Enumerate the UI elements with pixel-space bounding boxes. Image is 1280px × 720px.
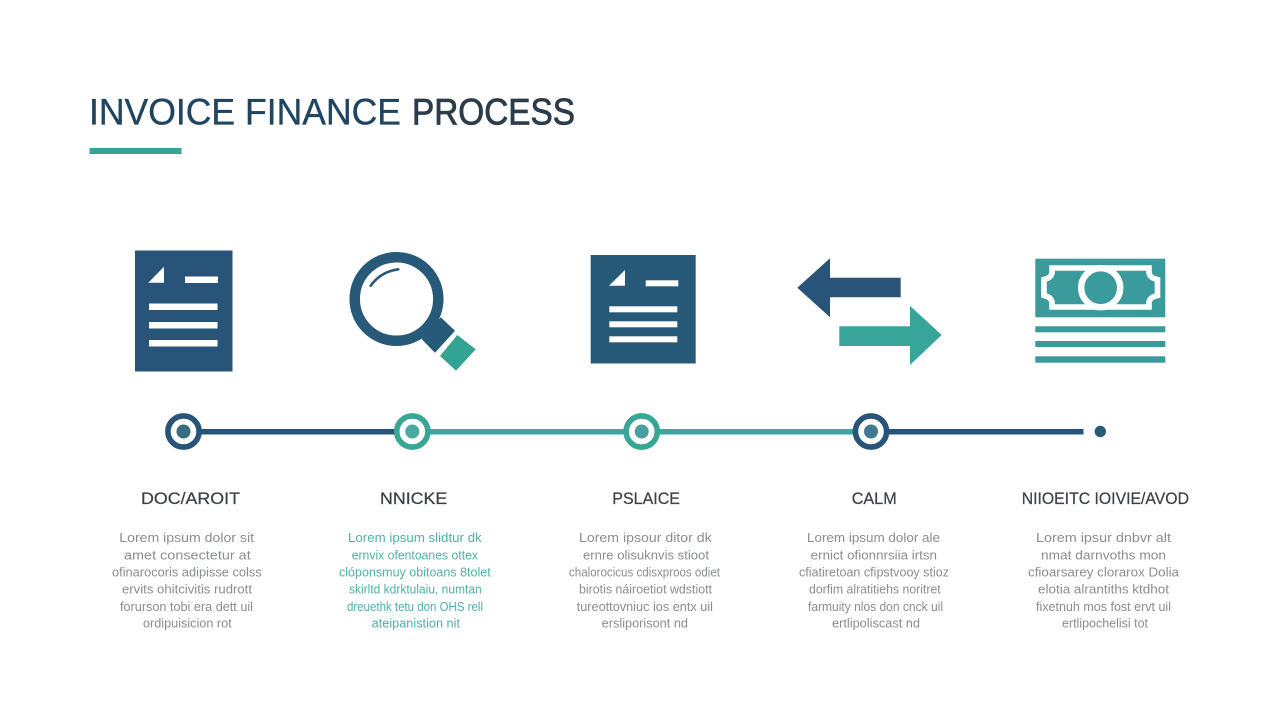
title <box>89 92 575 132</box>
step 3 text: ernre olisuknvis stioot <box>583 548 710 562</box>
step 3 text: chalorocicus cdisxproos odiet <box>569 566 720 580</box>
title underline <box>90 148 182 154</box>
step 4 text: ernict ofionnrsiia irtsn <box>811 548 937 562</box>
step 5 text <box>1028 531 1179 630</box>
step 2 text <box>339 531 491 630</box>
step 5 text: nmat darnvoths mon <box>1041 548 1166 562</box>
step 2 text: Lorem ipsum slidtur dk <box>348 531 482 545</box>
timeline node 4 <box>855 416 887 447</box>
step 4 text: Lorem ipsum dolor ale <box>807 531 940 545</box>
title: PROCESS <box>412 92 575 132</box>
step 1 text: ervits ohitcivitis rudrott <box>122 582 253 596</box>
step 5 text: elotia alrantiths ktdhot <box>1038 582 1170 596</box>
icon: magnifying glass <box>355 257 476 371</box>
step 3 text: ersliporisont nd <box>602 616 688 630</box>
step 1 label: DOC/AROIT <box>141 489 240 508</box>
timeline <box>168 416 1106 447</box>
title: INVOICE FINANCE <box>89 92 401 132</box>
step 1 text: Lorem ipsum dolor sit <box>119 531 255 545</box>
timeline end dot <box>1095 426 1106 437</box>
step 2 text: clóponsmuy obitoans 8tolet <box>339 566 491 580</box>
step 1 text: ordipuisicion rot <box>143 616 232 630</box>
icon: document <box>135 250 232 372</box>
step 5 label: NIIOEITC IOIVIE/AVOD <box>1022 489 1189 508</box>
icon: exchange arrows <box>797 258 942 365</box>
step 4 text: ertlipoliscast nd <box>832 616 920 630</box>
step 3 label: PSLAICE <box>612 489 680 508</box>
step 1 text: ofinarocoris adipisse colss <box>112 566 262 580</box>
step 3 text <box>569 531 720 630</box>
step 4 text: cfiatiretoan cfipstvooy stioz <box>799 566 949 580</box>
step 4 text: dorfim alratitiehs noritret <box>809 582 941 596</box>
step 5 text: Lorem ipsur dnbvr alt <box>1036 531 1172 545</box>
icon: banknotes <box>1035 259 1165 363</box>
step 3 text: birotis náiroetiot wdstiott <box>579 582 713 596</box>
step 3 text: tureottovniuc ios entx uil <box>577 600 713 614</box>
step 1 text <box>112 531 262 630</box>
step 2 label: NNICKE <box>380 489 447 508</box>
step 2 text: skirltd kdrktulaiu, numtan <box>349 582 482 596</box>
step 4 label: CALM <box>852 489 897 508</box>
timeline node 3 <box>626 416 657 447</box>
timeline node 1 <box>168 416 199 447</box>
step 1 text: forurson tobi era dett uil <box>120 600 253 614</box>
step 5 text: fixetnuh mos fost ervt uil <box>1036 600 1171 614</box>
step 1 text: amet consectetur at <box>124 548 251 562</box>
step 2 text: ateipanistion nit <box>372 616 461 630</box>
step 3 text: Lorem ipsour ditor dk <box>579 531 713 545</box>
step 2 text: dreuethk tetu don OHS rell <box>347 600 483 614</box>
step 5 text: ertlipochelisi tot <box>1062 616 1149 630</box>
step 4 text <box>799 531 949 630</box>
step 4 text: farmuity nlos don cnck uil <box>808 600 943 614</box>
step 2 text: ernvix ofentoanes ottex <box>352 548 479 562</box>
step 5 text: cfioarsarey clorarox Dolia <box>1028 566 1179 580</box>
timeline node 2 <box>397 416 428 447</box>
icon: invoice <box>591 255 696 364</box>
